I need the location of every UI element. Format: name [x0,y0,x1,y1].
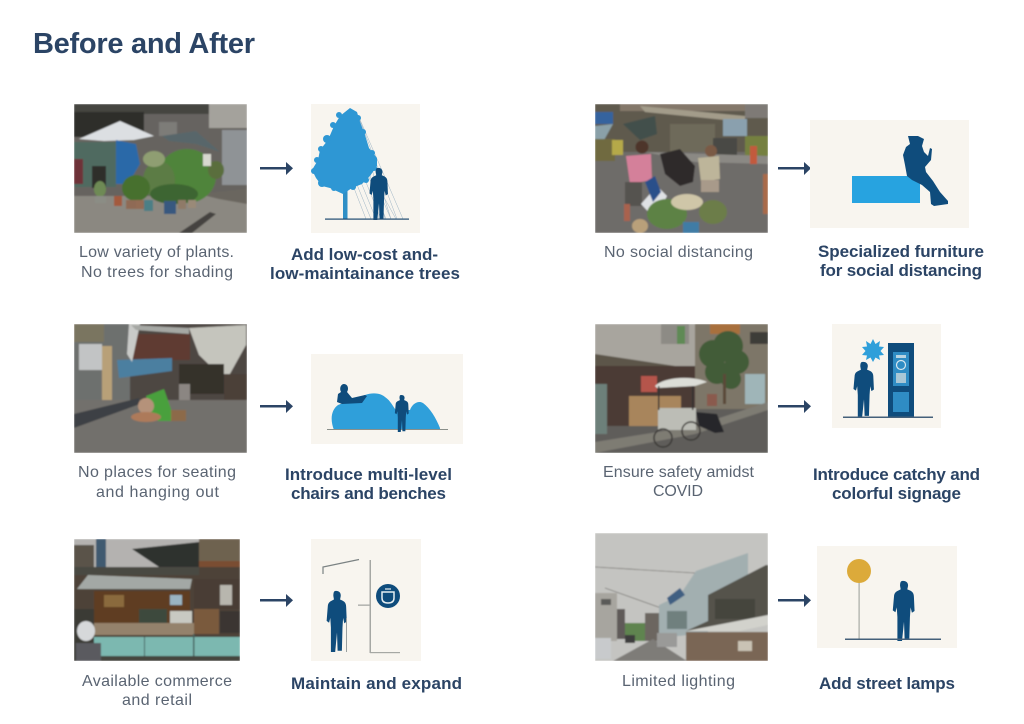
photo: dim street with old buildings [595,533,768,661]
caption: before: and hanging out [96,484,220,501]
illustration: multi-level cloud bench [311,354,463,444]
caption: after: Maintain and expand [291,674,462,693]
photo: crowded street vendors [595,104,768,233]
title: Before and After [33,28,255,60]
caption: after: chairs and benches [291,484,446,503]
caption: after [813,465,980,503]
arrow [260,162,293,175]
photo: tricycle parked on a street [595,324,768,453]
caption: before: No social distancing [604,244,753,261]
caption: before [79,244,234,281]
illustration: street lamp and person [817,546,957,648]
photo: small retail shop [74,539,240,661]
panel: commerce [74,539,462,709]
illustration: shop sign and person [311,539,421,661]
caption: before [82,673,232,709]
caption: before: Ensure safety amidst [603,464,755,481]
panel: plants and trees [74,104,460,283]
caption: after: Specialized furniture [818,242,984,261]
illustration: signage kiosk [832,324,941,428]
caption: after: Introduce multi-level [285,465,452,484]
caption: before: Limited lighting [622,673,735,690]
panel: lighting [595,533,957,693]
illustration: tree with shade [311,104,420,233]
caption: before: No places for seating [78,464,236,481]
caption: after [285,465,452,503]
photo: potted plants on a street corner [74,104,247,233]
caption: after: Add street lamps [819,674,955,693]
arrow [778,594,811,607]
panel: signage [595,324,980,503]
panel: seating [74,324,463,503]
panel: social distancing [595,104,984,280]
caption: after: Introduce catchy and [813,465,980,484]
arrow [778,400,811,413]
caption: before: Available commerce [82,673,232,690]
arrow [260,594,293,607]
caption: before: No trees for shading [81,264,233,281]
caption: after: for social distancing [820,261,982,280]
caption: before [603,464,755,500]
caption: after: Add low-cost and- [291,245,438,264]
caption: before: Low variety of plants. [79,244,234,261]
caption: before: and retail [122,692,192,709]
caption: after: low-maintainance trees [270,264,460,283]
caption: after: colorful signage [832,484,961,503]
arrow [260,400,293,413]
caption: after [818,242,984,280]
caption: before [78,464,236,501]
caption: after [270,245,460,283]
illustration: bench with seated person [810,120,969,228]
arrow [778,162,811,175]
photo: man crouching on the pavement [74,324,247,453]
caption: before: COVID [653,483,703,500]
